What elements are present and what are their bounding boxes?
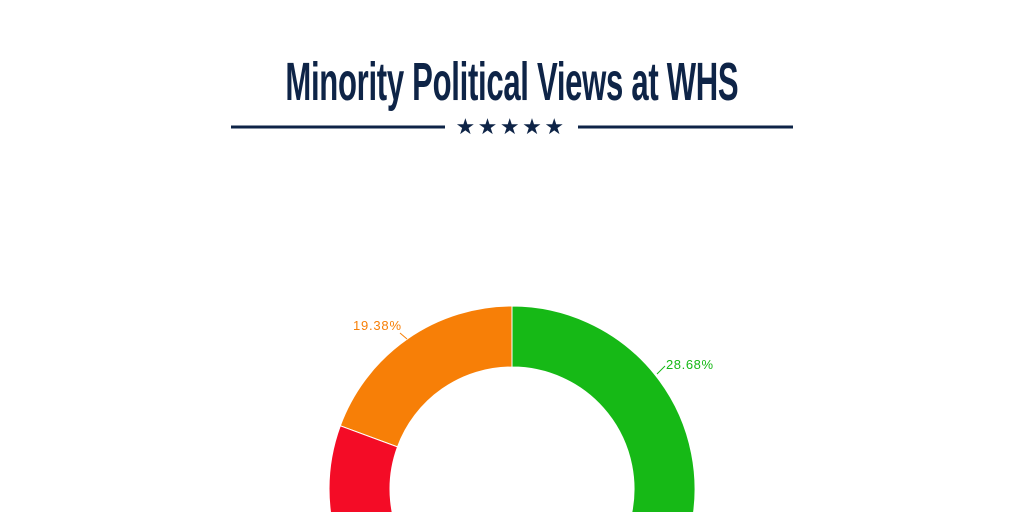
segment: orange 19.38% [340, 306, 512, 447]
label: 19.38%: 19.38% [353, 318, 401, 333]
label: 19.38% [353, 318, 407, 339]
segment: red [329, 426, 512, 512]
label: 28.68%: 28.68% [666, 357, 713, 372]
segment: green 28.68% [512, 306, 695, 512]
title divider with stars: ★★★★★ [455, 115, 567, 140]
title: Minority Political Views at WHS [286, 52, 738, 112]
